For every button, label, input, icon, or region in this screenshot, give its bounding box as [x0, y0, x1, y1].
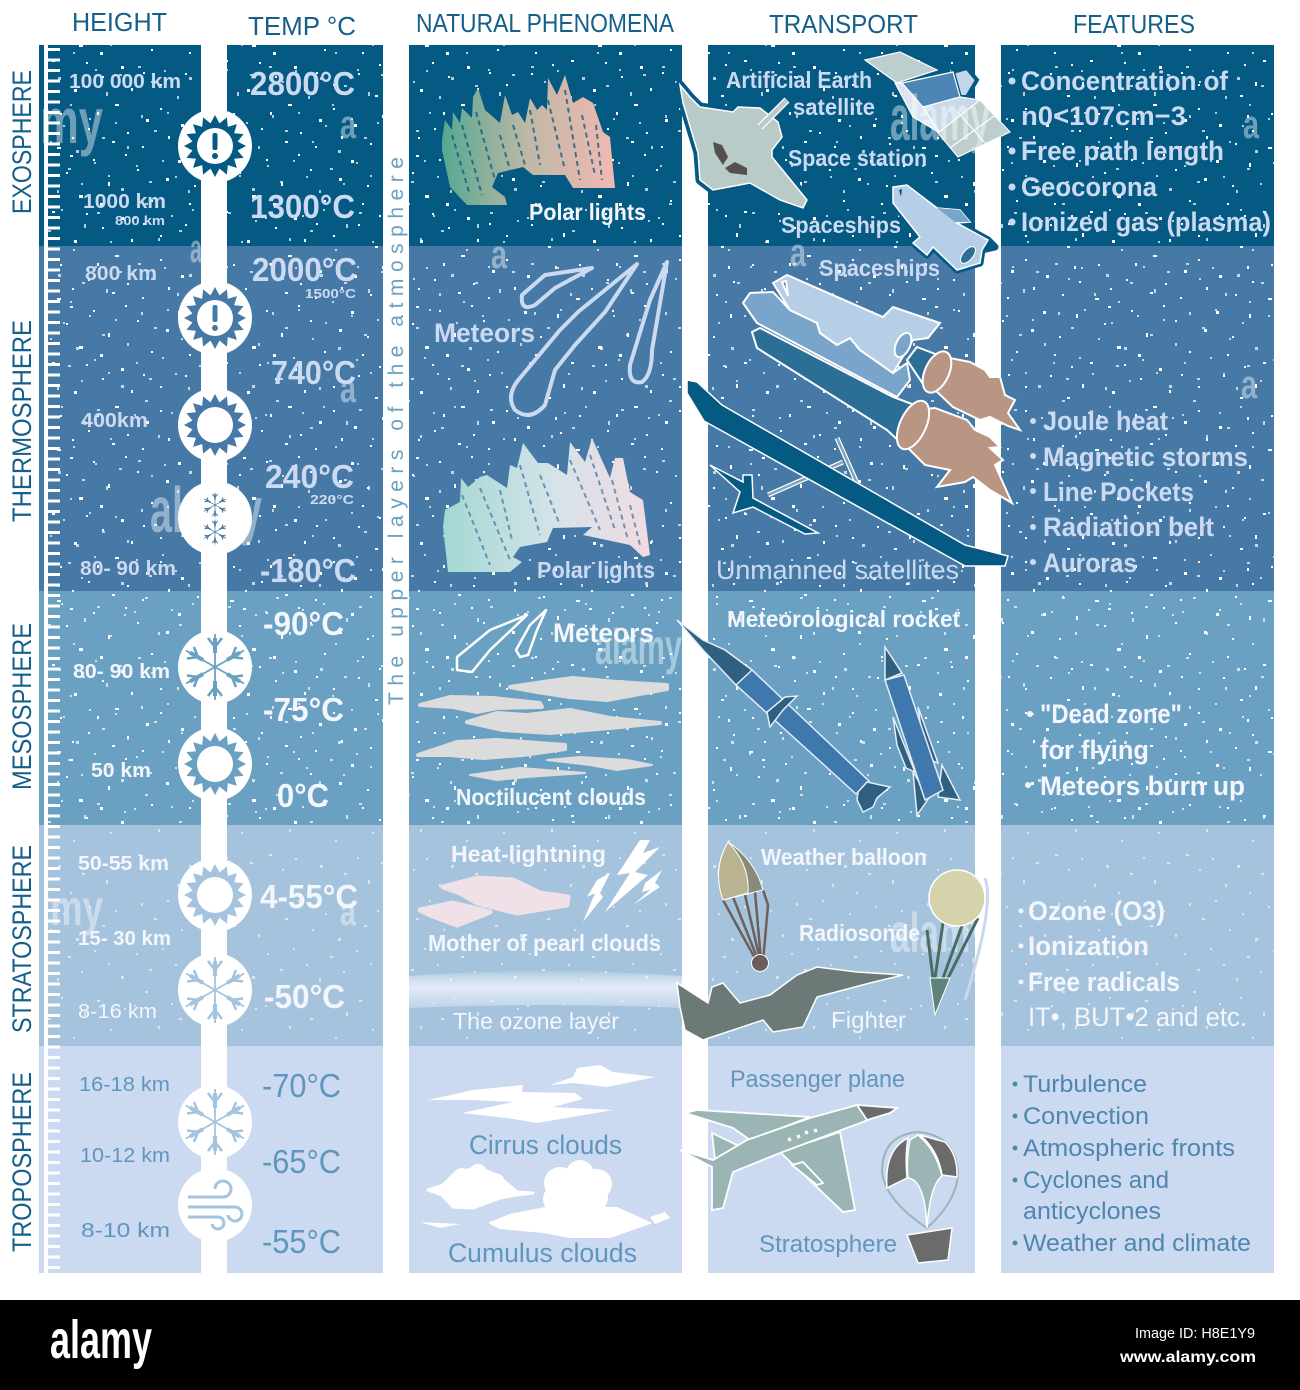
height labels: 100 000 km [69, 71, 181, 93]
phenomena labels [428, 199, 661, 1268]
footer bar [0, 1300, 1300, 1390]
features: troposphere: Cyclones and [1023, 1167, 1169, 1194]
features: stratosphere: Free radicals [1028, 967, 1180, 997]
features: mesosphere [1025, 699, 1245, 801]
layer name: mesosphere: MESOSPHERE [7, 623, 37, 790]
aurora: thermosphere polar lights [443, 438, 650, 572]
features: mesosphere: "Dead zone" [1040, 699, 1182, 729]
features: thermosphere [1030, 406, 1248, 578]
column heading: natural phenomena: NATURAL PHENOMENA [416, 8, 675, 38]
height labels: 15- 30 km [78, 928, 171, 950]
panel: exosphere band [39, 45, 1274, 246]
height labels: 10-12 km [80, 1145, 170, 1167]
column heading: height: HEIGHT [72, 7, 167, 37]
stock watermark overlays: a [1243, 103, 1260, 147]
features: mesosphere: Meteors burn up [1040, 771, 1245, 801]
temperature labels: -50°C [264, 978, 345, 1015]
space station [680, 85, 807, 208]
features: thermosphere: Radiation belt [1043, 512, 1214, 542]
panel: troposphere band [39, 1046, 1274, 1273]
features: stratosphere: Ozone (O3) [1028, 896, 1165, 926]
features: mesosphere: for flying [1040, 735, 1149, 765]
mother of pearl clouds [420, 878, 568, 925]
temperature labels: -75°C [263, 691, 344, 728]
phenomena labels: Cirrus clouds [469, 1130, 622, 1160]
stock watermark overlays: a [1241, 363, 1258, 407]
cumulus clouds [420, 1160, 670, 1237]
features: thermosphere: Auroras [1043, 548, 1137, 578]
features: stratosphere: IT•, BUT•2 and etc. [1028, 1002, 1247, 1032]
icon: thermosphere warning sun [178, 281, 252, 355]
meteorological rocket left [677, 620, 890, 812]
noctilucent clouds [418, 678, 667, 780]
phenomena labels: Cumulus clouds [448, 1238, 637, 1268]
spaceship small [893, 185, 995, 270]
phenomena labels: Meteors [434, 318, 535, 348]
icon: thermosphere sun [178, 388, 252, 462]
meteorological rocket right [885, 647, 960, 815]
layer name: thermosphere: THERMOSPHERE [7, 320, 37, 522]
temperature labels: 240°C [265, 458, 354, 495]
stock watermark overlays [40, 85, 1260, 964]
ozone layer [409, 971, 682, 1008]
features: exosphere [1008, 66, 1271, 237]
temperature labels: -70°C [262, 1067, 341, 1104]
stratosphere balloon [882, 1132, 958, 1263]
height labels: 80- 90 km [80, 558, 176, 580]
stock watermark overlays: my [40, 85, 103, 157]
features: exosphere: Concentration of [1021, 66, 1229, 96]
icon: mesosphere sun [178, 727, 252, 801]
icon: mesosphere snowflake [178, 630, 252, 704]
height labels: 16-18 km [79, 1074, 170, 1096]
features: exosphere: Free path length [1021, 136, 1224, 166]
column heading: features: FEATURES [1073, 9, 1195, 39]
features: stratosphere: Ionization [1028, 931, 1149, 961]
temperature labels: 0°C [277, 777, 329, 814]
vertical caption: upper layers: The upper layers of the atmosphere [385, 157, 408, 705]
temperature labels: -65°C [262, 1143, 341, 1180]
transport labels: Unmanned satellites [716, 555, 959, 585]
icon: troposphere wind [178, 1168, 252, 1242]
cirrus clouds [428, 1065, 655, 1123]
phenomena labels: Meteors [553, 618, 654, 648]
transport labels: Spaceships [781, 212, 901, 238]
features: stratosphere [1018, 896, 1247, 1032]
temperature labels: -180°C [260, 552, 356, 589]
height labels: 8-16 km [78, 1001, 157, 1023]
phenomena labels: Heat-lightning [451, 841, 606, 867]
features: exosphere: Geocorona [1021, 172, 1158, 202]
temperature labels: 2000°C [252, 251, 357, 288]
layer name: troposphere: TROPOSPHERE [7, 1072, 37, 1252]
phenomena labels: Polar lights [529, 199, 646, 225]
stock watermark overlays: a [491, 233, 508, 277]
temperature labels: 4-55°C [260, 878, 358, 915]
footer image id: Image ID: H8E1Y9 [1135, 1325, 1255, 1342]
temperature labels: -55°C [262, 1223, 341, 1260]
footer logo: alamy [50, 1310, 152, 1370]
features: exosphere: n0<107cm−3 [1021, 101, 1186, 131]
passenger plane [680, 1105, 897, 1212]
icon: stratosphere snowflake [178, 953, 252, 1027]
height labels: 800 km [85, 263, 157, 285]
stock watermark overlays: alamy [150, 474, 262, 546]
temperature labels: 1500°C [305, 286, 357, 301]
layer name: exosphere: EXOSPHERE [7, 70, 37, 214]
panel: stratosphere band [39, 825, 1274, 1046]
transport labels: Fighter [831, 1007, 906, 1033]
temperature labels: -90°C [263, 605, 344, 642]
stock watermark overlays: a [790, 231, 807, 275]
features: troposphere: Turbulence [1023, 1071, 1147, 1098]
icon: exosphere warning sun [178, 109, 252, 183]
temperature labels: 220°C [310, 492, 355, 507]
stock watermark overlays: a [340, 890, 357, 934]
stock watermark over satellite: alamy [890, 82, 990, 154]
transport labels: Passenger plane [730, 1066, 905, 1093]
height labels: 400km [81, 410, 148, 432]
meteors: mesosphere [457, 610, 546, 672]
layer name: stratosphere: STRATOSPHERE [7, 845, 37, 1033]
phenomena labels: The ozone layer [453, 1008, 619, 1034]
artificial satellite [865, 52, 1010, 157]
transport labels: Weather balloon [761, 844, 927, 870]
features: troposphere: Atmospheric fronts [1023, 1135, 1235, 1162]
transport labels [716, 67, 960, 1258]
icon: troposphere snowflake [178, 1085, 252, 1159]
transport labels: Radiosonde [799, 920, 920, 946]
stock watermark overlays: alamy [595, 619, 682, 675]
features: troposphere [1012, 1071, 1251, 1257]
transport labels: Meteorological rocket [727, 606, 960, 632]
panel: thermosphere band [39, 246, 1274, 591]
temperature labels: 2800°C [250, 65, 355, 102]
features: thermosphere: Line Pockets [1043, 477, 1194, 507]
phenomena labels: Mother of pearl clouds [428, 930, 661, 956]
height labels: 1000 km [83, 191, 166, 213]
stock watermark overlays: a [340, 103, 357, 147]
transport labels: satellite [793, 94, 875, 120]
radiosonde balloon [927, 870, 988, 1015]
height labels: 80- 90 km [73, 661, 170, 683]
features: thermosphere: Joule heat [1043, 406, 1168, 436]
icon: stratosphere sun [178, 858, 252, 932]
stock watermark overlays: a [340, 367, 357, 411]
temperature labels: 1300°C [250, 188, 355, 225]
stock watermark overlays: my [50, 880, 103, 936]
phenomena labels: Polar lights [537, 557, 655, 583]
space shuttle with boosters [743, 275, 1020, 503]
phenomena labels: Noctilucent clouds [456, 784, 646, 810]
transport labels: Space station [788, 145, 927, 171]
unmanned solar satellite [687, 380, 1008, 566]
transport labels: Spaceships [819, 255, 940, 281]
weather balloon [718, 842, 768, 972]
height labels: 800 km [115, 213, 165, 228]
icon: thermosphere snowflakes [178, 481, 252, 555]
height labels: 8-10 km [81, 1220, 170, 1242]
fighter jet [677, 967, 903, 1040]
stock watermark overlays: alamy [890, 901, 990, 964]
column heading: temperature: TEMP °C [248, 11, 356, 41]
features: troposphere: Convection [1023, 1103, 1149, 1130]
height labels: 50-55 km [78, 853, 169, 875]
altitude scale ticks [48, 48, 60, 1273]
transport labels: Artificial Earth [726, 67, 872, 93]
column heading: transport: TRANSPORT [769, 9, 918, 39]
meteors: thermosphere [511, 262, 667, 415]
lightning bolts [583, 840, 662, 922]
transport labels: Stratosphere [759, 1231, 897, 1258]
aurora: exosphere polar lights [442, 75, 615, 205]
panel: mesosphere band [39, 591, 1274, 825]
height labels [69, 71, 181, 1242]
features: troposphere: anticyclones [1023, 1198, 1161, 1225]
height labels: 50 km [91, 760, 151, 782]
temperature labels [250, 65, 358, 1260]
temperature labels: 740°C [271, 354, 356, 391]
features: troposphere: Weather and climate [1023, 1230, 1251, 1257]
footer url: www.alamy.com [1119, 1349, 1256, 1366]
features: exosphere: Ionized gas (plasma) [1021, 207, 1271, 237]
features: thermosphere: Magnetic storms [1043, 442, 1248, 472]
stock watermark overlays: a [190, 227, 202, 271]
